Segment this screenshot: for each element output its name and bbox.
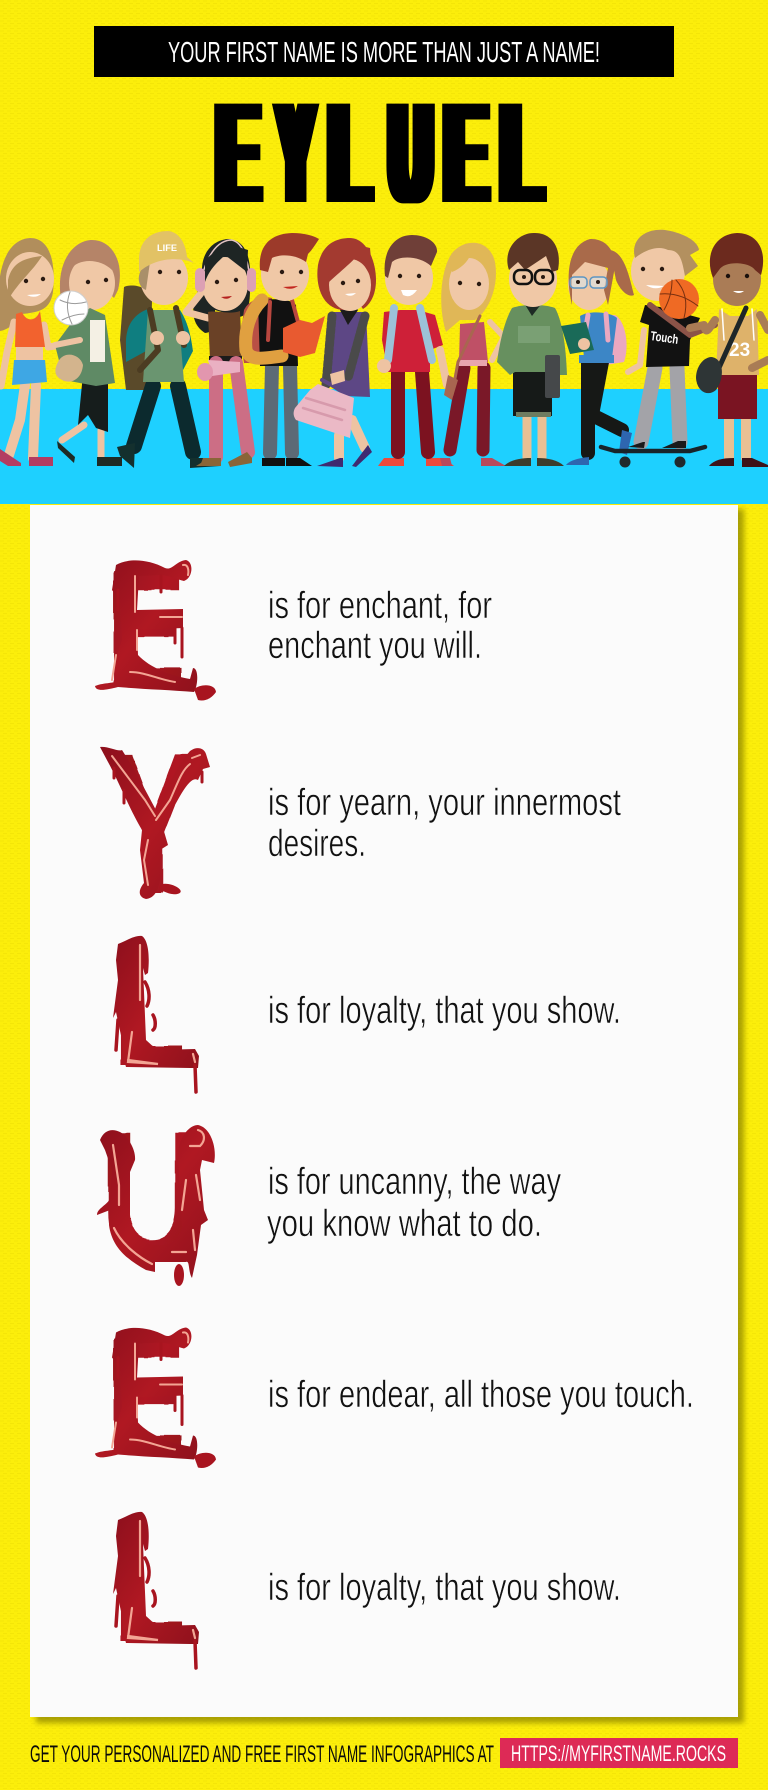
explanation text: E: enchant you will. xyxy=(268,625,482,667)
title: name: Y xyxy=(278,72,313,233)
blood letter E xyxy=(95,535,216,722)
blue floor band xyxy=(0,389,768,504)
blood letter Y: Y xyxy=(110,711,197,935)
person 10: girl with ponytail, tablet and pink backpack xyxy=(561,239,634,465)
person 3: hiker with yellow cap and backpack xyxy=(117,231,220,468)
title: name: E xyxy=(217,74,259,233)
title: name: L xyxy=(501,73,542,233)
blood letter E: E xyxy=(106,535,186,722)
title: name: U xyxy=(390,73,431,234)
explanation text: Y xyxy=(268,782,621,865)
explanation text: E: is for enchant, for xyxy=(268,585,492,627)
person 5: boy with red hair and book xyxy=(240,233,325,466)
header banner xyxy=(94,26,674,77)
explanation text: U xyxy=(267,1161,561,1245)
explanation text: U: you know what to do. xyxy=(267,1203,542,1245)
explanation text: Y: is for yearn, your innermost xyxy=(268,782,621,824)
explanation text: Y: desires. xyxy=(268,823,366,865)
person 4: girl with headphones xyxy=(186,239,256,467)
person 11: skateboarder with basketball xyxy=(601,230,715,468)
title: name: E xyxy=(445,74,487,233)
blood letter E (second): E xyxy=(106,1302,186,1489)
explanation text: L second: is for loyalty, that you show. xyxy=(268,1567,621,1609)
person 11: skateboarder with basketball: Touch xyxy=(650,328,679,347)
person 6: girl in purple with pink bag xyxy=(294,238,376,467)
blood letter L (second): L xyxy=(113,1483,186,1678)
explanation text: U: is for uncanny, the way xyxy=(268,1161,561,1203)
title: name: L xyxy=(329,73,370,233)
explanation text: L: is for loyalty, that you show. xyxy=(268,990,621,1032)
blood letter L: L xyxy=(113,907,186,1102)
panel shadow xyxy=(36,509,744,1723)
person 7: boy in red shirt with backpack straps xyxy=(377,235,454,466)
person 8: blonde girl in pink top xyxy=(440,243,506,466)
title: name xyxy=(217,72,542,234)
explanation text: E xyxy=(268,585,492,667)
person 3: hiker with yellow cap and backpack: LIFE xyxy=(157,243,177,253)
person 12: boy in tan tank top with shoulder bag xyxy=(690,233,768,467)
group of people illustration xyxy=(0,230,768,468)
blood letter E (second) xyxy=(95,1302,216,1489)
blood letter U: U xyxy=(100,1093,205,1297)
person 2: girl in green jacket with volleyball xyxy=(54,240,122,466)
person 12: boy in tan tank top with shoulder bag: 23 xyxy=(729,340,750,361)
person 9: boy with glasses and green sweater xyxy=(497,233,567,466)
person 1: girl in orange top xyxy=(0,238,78,466)
white content panel xyxy=(30,505,738,1717)
